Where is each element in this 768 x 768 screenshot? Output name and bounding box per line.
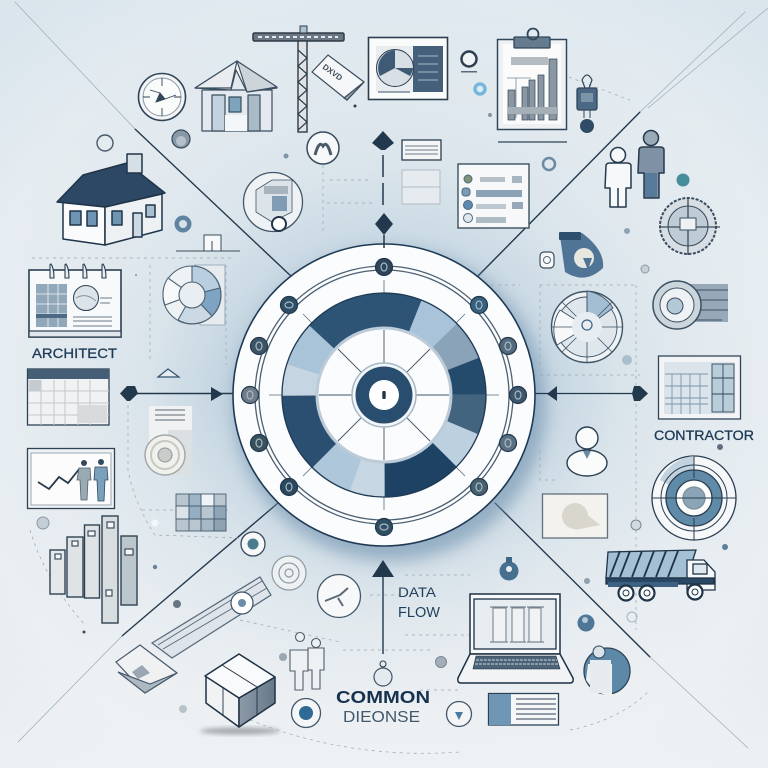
label: CONTRACTOR: CONTRACTOR (654, 428, 754, 443)
icon: compass clock (138, 74, 186, 120)
icon: large house (57, 154, 165, 245)
outer ring tracks (255, 266, 513, 524)
icon: tilted ruler bar (152, 577, 271, 658)
icon: blue ring (475, 84, 485, 94)
icon: fan disc (318, 574, 360, 618)
label: COMMON: COMMON (336, 687, 430, 707)
central hub (352, 363, 416, 427)
icon: swirl disc (272, 556, 306, 590)
icon: spreadsheet window (28, 369, 109, 425)
label: FLOW: FLOW (398, 605, 440, 621)
icon: grid matrix (176, 494, 226, 531)
label: ARCHITECT: ARCHITECT (32, 346, 117, 361)
icon: small framed square (176, 235, 240, 251)
icon: 3D cube (200, 654, 280, 734)
icon: outline people (290, 632, 324, 690)
icon: monitor with globe (368, 38, 448, 100)
label: DIEONSE: DIEONSE (343, 709, 420, 726)
segmented ring (265, 276, 503, 514)
icon: photo card (542, 494, 608, 538)
inner disc (317, 328, 451, 462)
icon: mini clock ring top-left (97, 135, 113, 151)
icon: grey small button (436, 656, 446, 668)
icon: teal ring bottom-left (241, 532, 265, 556)
icon: dump truck (606, 550, 715, 600)
icon: document with gear (145, 406, 192, 475)
icon: dark ring badge (461, 52, 477, 72)
icon: teal badge (676, 174, 690, 186)
arrow: left from wheel (120, 386, 233, 401)
icon: person medallion (584, 646, 630, 696)
icon: radial wheel right (551, 291, 623, 363)
icon: id badge (577, 75, 597, 133)
wheel shadow (234, 249, 546, 561)
icon: helmet circle badge (307, 132, 339, 164)
icon: architect calendar plan (29, 264, 121, 337)
icon: memo document (402, 140, 441, 204)
icon: tower crane (253, 26, 344, 132)
icon: hexagon dial (244, 172, 302, 232)
icon: target rings (652, 456, 736, 540)
wheel outer disc (233, 244, 535, 546)
spokes (269, 280, 499, 510)
icon: dotted gear globe (659, 198, 720, 255)
icon: blueprint screen (658, 356, 740, 419)
icon: article card (488, 694, 558, 725)
icon: blue button (578, 614, 594, 632)
arrow: up from wheel (372, 131, 394, 248)
icon: lock card blob (540, 232, 603, 278)
icon: binder bars (50, 516, 137, 623)
icon: segmented pie dial (163, 265, 225, 325)
dashed connector guides (30, 55, 650, 753)
icon: small target badge (174, 216, 192, 232)
icon: tilted sign: DXVD (321, 62, 344, 83)
icon: user avatar (567, 427, 607, 476)
arrow: down to common environment (372, 560, 394, 686)
icon: tilted sign (312, 55, 364, 100)
icon: laptop (458, 594, 573, 683)
scattered small marks (37, 84, 728, 713)
central wheel diagram (233, 244, 546, 561)
arrow: right from wheel (535, 386, 648, 401)
icon: gear with stacked layers (653, 281, 728, 329)
icon: people pair top-right (605, 130, 664, 207)
icon: clipboard bar chart (498, 28, 566, 130)
icon: folded tray (116, 645, 177, 693)
icon: small grey badge (172, 130, 190, 148)
icon: swirl badge (543, 158, 555, 170)
icon: presentation board with people (28, 448, 114, 508)
icon: check list card (458, 164, 529, 228)
icon: small house with roof (195, 61, 277, 131)
divider under clipboard (498, 141, 567, 143)
ring nodes (242, 258, 526, 536)
icon: ring badge (446, 702, 472, 726)
icon: triangle marker (158, 369, 179, 377)
label: DATA: DATA (398, 585, 436, 600)
icon: teal keyhole blob (500, 557, 518, 580)
icon: blue dot ring (292, 698, 320, 728)
